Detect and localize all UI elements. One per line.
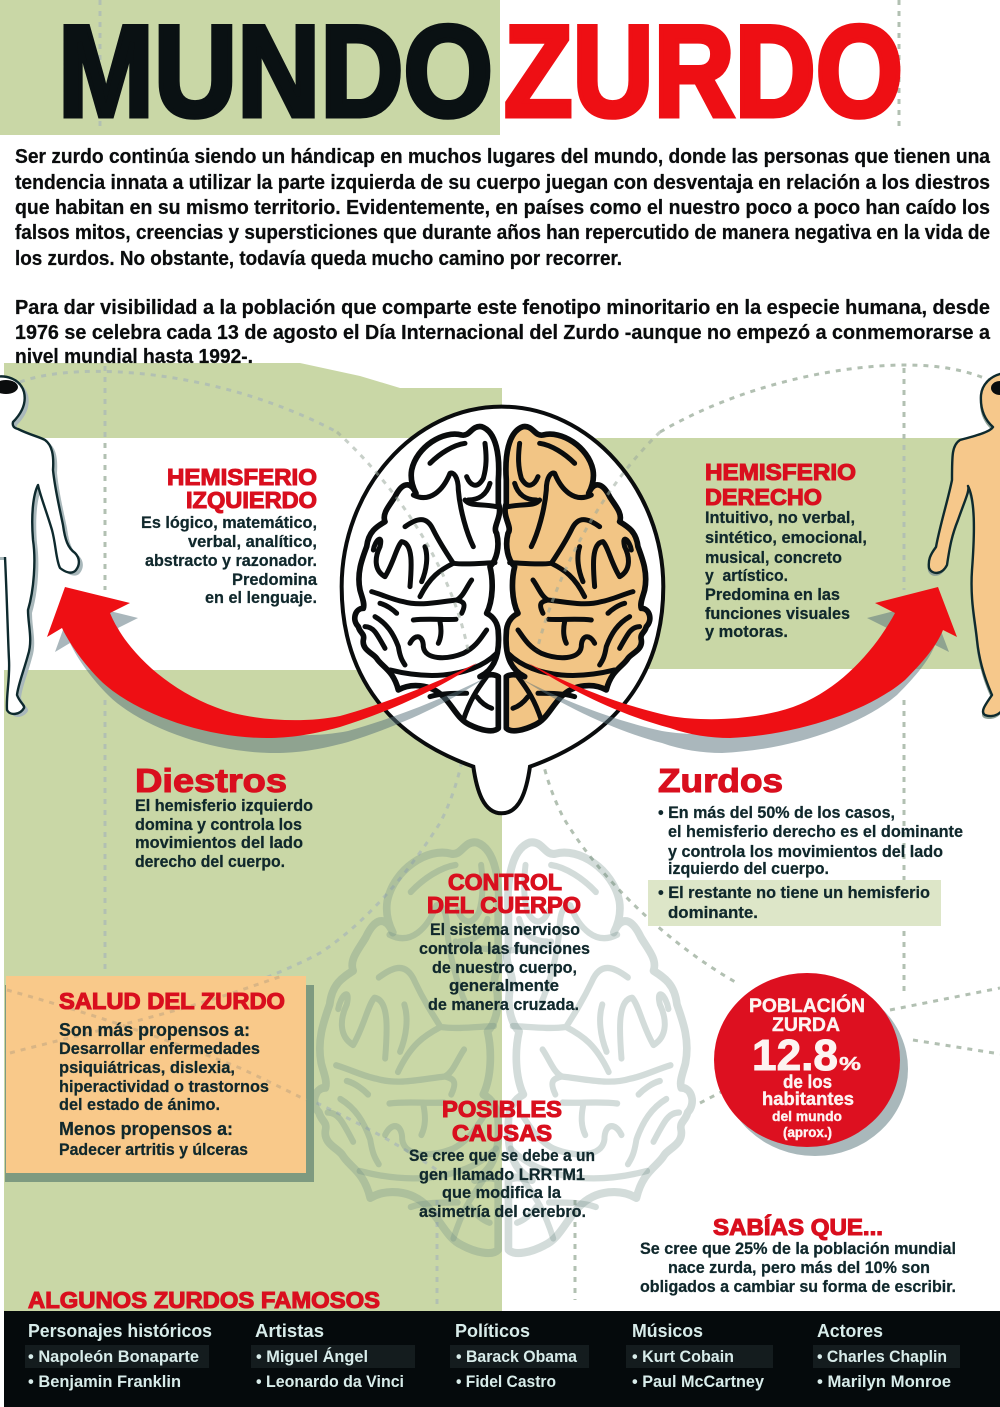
text: posibles causas: CAUSAS	[452, 1120, 552, 1146]
callout: poblacion zurda: %	[839, 1054, 861, 1074]
text: hemisferio izquierdo: Predomina	[232, 571, 318, 589]
panel: salud del zurdo: SALUD DEL ZURDO	[59, 988, 285, 1014]
text: diestros	[135, 762, 313, 871]
text: posibles causas: POSIBLES	[442, 1096, 562, 1122]
column: politicos	[455, 1321, 578, 1391]
text: posibles causas: que modifica la	[442, 1184, 562, 1202]
brain with head outline	[342, 407, 663, 813]
panel: salud del zurdo	[5, 976, 314, 1182]
intro text: 1976 se celebra cada 13 de agosto el Día Internacional del Zurdo -aunque no empezó a conmemorarse a	[15, 322, 991, 344]
column: politicos: • Barack Obama	[456, 1348, 578, 1366]
intro text: Para dar visibilidad a la población que comparte este fenotipo minoritario en la especie humana, desde	[15, 297, 990, 319]
text: control del cuerpo: El sistema nervioso	[430, 921, 580, 939]
column: personajes historicos: Personajes históricos	[28, 1321, 212, 1341]
text: diestros: derecho del cuerpo.	[135, 853, 285, 871]
arrow: right	[520, 587, 957, 753]
right figure	[928, 373, 1000, 719]
right hemisphere	[505, 427, 650, 731]
panel: salud del zurdo: Desarrollar enfermedades	[59, 1040, 260, 1058]
callout: poblacion zurda: POBLACIÓN	[749, 995, 865, 1017]
callout: poblacion zurda: (aprox.)	[783, 1124, 832, 1140]
heading: algunos zurdos famosos: ALGUNOS ZURDOS FAMOSOS	[28, 1287, 380, 1313]
text: zurdos: izquierdo del cuerpo.	[668, 860, 829, 878]
row highlights	[25, 1345, 960, 1368]
text: control del cuerpo: de manera cruzada.	[428, 996, 579, 1014]
panel: famous left-handers bar	[4, 1311, 1000, 1407]
column: personajes historicos: • Benjamin Franklin	[28, 1373, 181, 1391]
title: MUNDO	[58, 0, 493, 144]
text: hemisferio derecho: sintético, emocional,	[705, 529, 867, 547]
text: hemisferio izquierdo	[141, 464, 318, 607]
callout: poblacion zurda	[714, 973, 908, 1156]
text: hemisferio derecho: y artístico.	[705, 567, 788, 585]
text: sabias que: Se cree que 25% de la población mundial	[640, 1240, 956, 1258]
intro text	[15, 146, 991, 368]
text: hemisferio derecho: Intuitivo, no verbal,	[705, 509, 855, 527]
text: hemisferio derecho: y motoras.	[705, 623, 788, 641]
text: posibles causas: Se cree que se debe a un	[409, 1147, 595, 1165]
callout: poblacion zurda: habitantes	[762, 1089, 854, 1109]
text: sabias que: obligados a cambiar su forma de escribir.	[640, 1278, 956, 1296]
text: hemisferio izquierdo: Es lógico, matemático,	[141, 514, 317, 532]
text: sabias que: nace zurda, pero más del 10% son	[668, 1259, 930, 1277]
column: artistas: Artistas	[255, 1321, 324, 1341]
ghost brain	[314, 842, 692, 1253]
column: actores	[817, 1321, 951, 1391]
left hemisphere	[355, 427, 500, 731]
left figure	[0, 376, 83, 717]
column: musicos: • Kurt Cobain	[632, 1348, 734, 1366]
text: zurdos: dominante.	[668, 904, 758, 922]
text: hemisferio derecho	[705, 459, 867, 641]
text: zurdos	[648, 762, 963, 926]
text: hemisferio izquierdo: en el lenguaje.	[205, 589, 317, 607]
panel: salud del zurdo: psiquiátricas, dislexia,	[59, 1059, 235, 1077]
column: personajes historicos: • Napoleón Bonaparte	[28, 1348, 199, 1366]
column: politicos: Políticos	[455, 1321, 530, 1341]
text: hemisferio izquierdo: abstracto y razonador.	[145, 552, 317, 570]
intro text: los zurdos. No obstante, todavía queda mucho camino por recorrer.	[15, 248, 622, 270]
text: posibles causas: gen llamado LRRTM1	[419, 1166, 585, 1184]
column: musicos: • Paul McCartney	[632, 1373, 765, 1391]
text: control del cuerpo	[419, 869, 590, 1014]
text: zurdos: • En más del 50% de los casos,	[658, 804, 895, 822]
callout: poblacion zurda: ZURDA	[772, 1015, 840, 1036]
text: zurdos: y controla los movimientos del lado	[668, 843, 943, 861]
text: posibles causas	[409, 1096, 595, 1221]
text: hemisferio derecho: DERECHO	[705, 484, 822, 510]
text: control del cuerpo: controla las funciones	[419, 940, 590, 958]
intro text: que habitan en su mismo territorio. Evidentemente, en países como el nuestro poco a poco han caído los	[15, 197, 990, 219]
text: sabias que: SABÍAS QUE...	[713, 1213, 883, 1240]
column: musicos	[632, 1321, 765, 1391]
column: actores: Actores	[817, 1321, 883, 1341]
text: posibles causas: asimetría del cerebro.	[419, 1203, 586, 1221]
column: artistas	[255, 1321, 404, 1391]
column: artistas: • Leonardo da Vinci	[256, 1373, 404, 1391]
text: diestros: Diestros	[135, 762, 287, 799]
text: control del cuerpo: DEL CUERPO	[427, 892, 581, 918]
arrow: left	[47, 587, 485, 753]
column: actores: • Charles Chaplin	[817, 1348, 947, 1366]
panel: salud del zurdo: Menos propensos a:	[59, 1119, 233, 1139]
callout: poblacion zurda: del mundo	[772, 1108, 842, 1124]
intro text: tendencia innata a utilizar la parte izquierda de su cuerpo juegan con desventaja en relación a los diestros	[15, 172, 990, 194]
panel: salud del zurdo: del estado de ánimo.	[59, 1096, 220, 1114]
text: hemisferio derecho: funciones visuales	[705, 605, 850, 623]
column: personajes historicos	[28, 1321, 212, 1391]
column: actores: • Marilyn Monroe	[817, 1373, 951, 1391]
column: politicos: • Fidel Castro	[456, 1373, 556, 1391]
text: zurdos: Zurdos	[658, 762, 783, 799]
text: hemisferio izquierdo: IZQUIERDO	[186, 487, 317, 513]
text: diestros: domina y controla los	[135, 816, 302, 834]
text: control del cuerpo: CONTROL	[448, 869, 562, 895]
text: hemisferio derecho: HEMISFERIO	[705, 459, 856, 485]
text: diestros: movimientos del lado	[135, 834, 303, 852]
text: control del cuerpo: generalmente	[449, 977, 559, 995]
dashes seen through brain	[337, 432, 660, 650]
column: artistas: • Miguel Ángel	[256, 1347, 368, 1366]
text: sabias que	[640, 1213, 956, 1296]
callout: poblacion zurda: de los	[783, 1072, 832, 1092]
panel: salud del zurdo: Padecer artritis y úlceras	[59, 1141, 248, 1159]
text: hemisferio derecho: Predomina en las	[705, 586, 840, 604]
text: hemisferio izquierdo: verbal, analítico,	[188, 533, 317, 551]
text: control del cuerpo: de nuestro cuerpo,	[432, 959, 577, 977]
title: ZURDO	[504, 0, 903, 144]
text: hemisferio izquierdo: HEMISFERIO	[167, 464, 317, 490]
intro text: Ser zurdo continúa siendo un hándicap en muchos lugares del mundo, donde las personas que tienen una	[15, 146, 991, 168]
title	[58, 0, 903, 144]
text: zurdos: el hemisferio derecho es el dominante	[668, 823, 963, 841]
callout: poblacion zurda: 12.8	[752, 1031, 838, 1080]
column: musicos: Músicos	[632, 1321, 703, 1341]
intro text: nivel mundial hasta 1992-.	[15, 346, 253, 368]
panel: salud del zurdo: hiperactividad o trastornos	[59, 1078, 269, 1096]
text: zurdos: • El restante no tiene un hemisferio	[658, 884, 930, 902]
text: hemisferio derecho: musical, concreto	[705, 549, 842, 567]
text: diestros: El hemisferio izquierdo	[135, 797, 313, 815]
panel: salud del zurdo: Son más propensos a:	[59, 1020, 250, 1040]
